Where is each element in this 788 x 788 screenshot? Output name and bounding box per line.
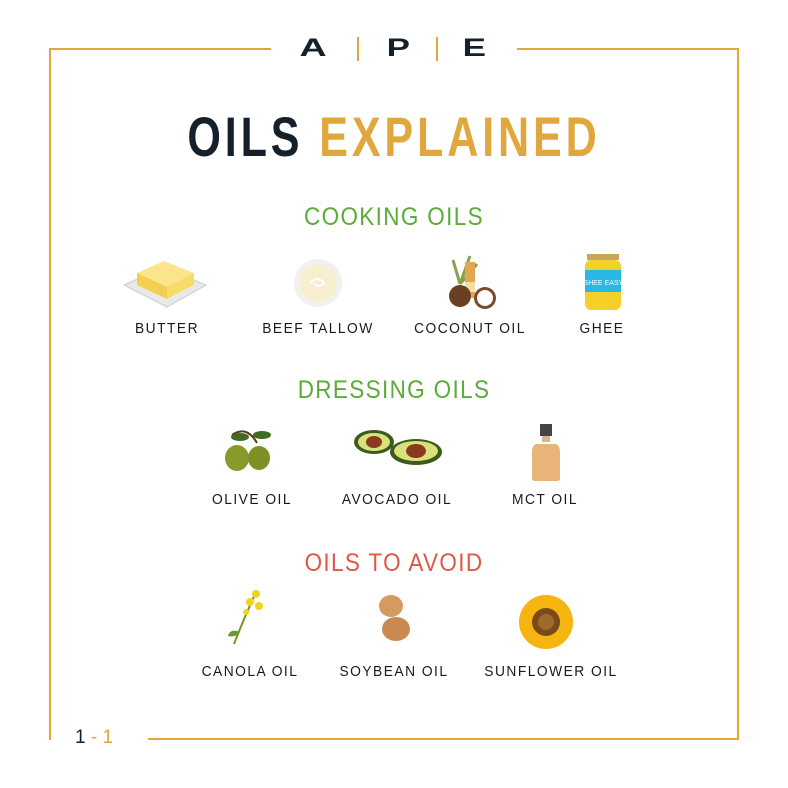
text: AVOCADO OIL [342,491,452,508]
heading: dressing oils: DRESSING OILS [298,376,490,404]
icon: olives [225,430,271,471]
logo: APE: A [299,34,327,62]
text: SOYBEAN OIL [339,663,448,680]
text: SUNFLOWER OIL [484,663,618,680]
icon: avocado [354,430,442,465]
text: GHEE [579,320,624,337]
icon: beef tallow [294,259,342,307]
logo: APE [299,34,486,62]
icon: mct oil [532,424,560,481]
text: MCT OIL [512,491,578,508]
icon: butter [123,261,207,308]
title: OILS EXPLAINED [187,105,601,168]
text: BEEF TALLOW [262,320,374,337]
page number: 1 - 1 [75,727,113,748]
icon: ghee [583,254,623,310]
icon: soybean [379,595,410,641]
text: CANOLA OIL [202,663,298,680]
heading: cooking oils: COOKING OILS [304,203,484,231]
icon: sunflower [519,595,573,649]
text: BUTTER [135,320,199,337]
text: COCONUT OIL [414,320,526,337]
heading: oils to avoid: OILS TO AVOID [305,549,483,577]
icon: coconut oil [449,256,496,309]
text: OLIVE OIL [212,491,292,508]
icon: canola [228,590,263,644]
logo: APE: P [387,34,410,62]
icon: ghee: GHEE EASY [583,280,623,287]
logo: APE: E [463,34,486,62]
